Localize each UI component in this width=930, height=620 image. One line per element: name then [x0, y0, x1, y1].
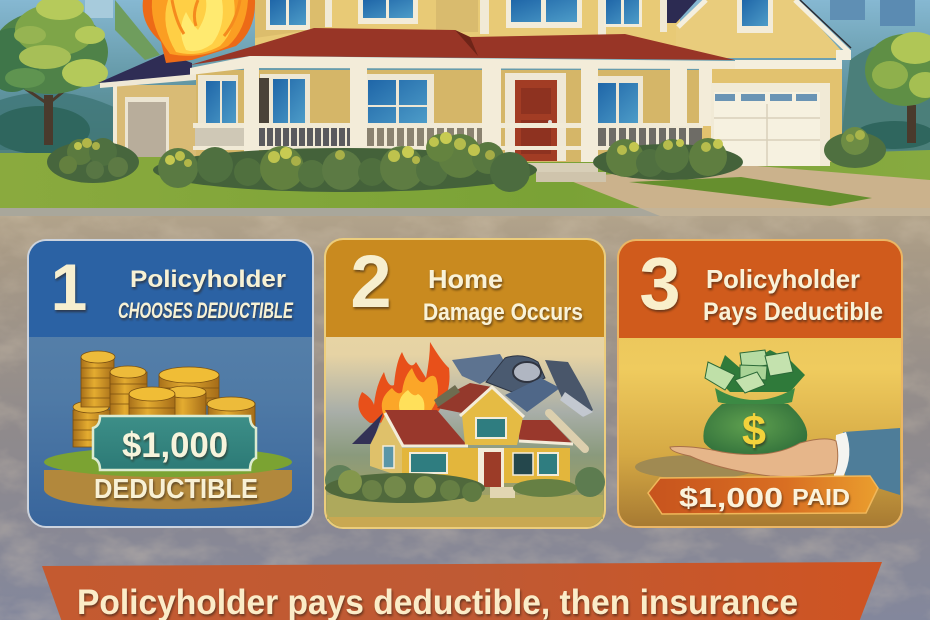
step 3 header: [619, 241, 901, 338]
step 1 title: Policyholder: [130, 266, 286, 293]
grass platform: [44, 447, 292, 509]
icon: sleeve: [834, 428, 900, 495]
columns: [244, 68, 712, 162]
step 1 number: 1: [51, 250, 87, 324]
step 3 title: Policyholder: [706, 264, 860, 294]
icon: hand: [670, 439, 838, 477]
tree: right: [865, 32, 930, 143]
bush: far left: [47, 138, 139, 183]
bush: far right: [824, 127, 886, 168]
step 1 header: [29, 241, 312, 337]
window: porch 3: [362, 74, 434, 124]
bush: long row: [153, 132, 537, 192]
banner: summary: [42, 562, 882, 620]
step 1 title: CHOOSES DEDUCTIBLE: [118, 298, 294, 323]
door: [505, 73, 566, 161]
ribbon: $1,000 paid: $1,000: [679, 482, 783, 513]
red roof: [190, 28, 735, 65]
window: porch 2: [259, 74, 310, 126]
window: upper 1: [266, 0, 310, 30]
ribbon: $1,000 paid: [648, 476, 878, 514]
house: porch wall: [196, 70, 700, 162]
label: deductible: DEDUCTIBLE: [94, 473, 258, 504]
step 1 title: [118, 266, 294, 323]
icon: money bag: [703, 350, 807, 458]
step 3 title: Pays Deductible: [703, 298, 883, 326]
icon: keys: [452, 354, 593, 449]
hand shadow: [635, 455, 759, 479]
right garage door: [711, 83, 830, 166]
step 2 title: Home: [428, 264, 503, 294]
band: [735, 60, 842, 69]
house: left garage: [98, 53, 200, 157]
coin stacks: [73, 351, 255, 447]
step 2 title: Damage Occurs: [423, 299, 583, 326]
window: porch 4: [594, 76, 643, 124]
step 2 number: 2: [350, 240, 392, 323]
bushes along house: [47, 127, 886, 192]
illustration: shrubs: [325, 470, 577, 503]
panel: step 1: [27, 239, 314, 528]
railings: [193, 123, 703, 150]
icon: damaged house: [352, 383, 573, 498]
house: right garage wall: [700, 66, 842, 162]
window: upper 3: [506, 0, 582, 28]
background sky and city: [0, 0, 930, 165]
plaque: $1,000: $1,000: [122, 426, 228, 465]
icon: money bag: $: [742, 407, 766, 455]
tree: left: [0, 0, 108, 145]
panel: step 3: [617, 239, 903, 528]
step 2 header: [326, 240, 604, 337]
step 3 number: 3: [639, 242, 681, 325]
window: upper 4: [604, 0, 642, 27]
window: porch 1: [198, 75, 238, 125]
background ground: [0, 205, 930, 620]
house: [98, 0, 851, 166]
panel: step 2: [324, 238, 606, 529]
illustration: lawn: [325, 465, 605, 527]
step 3 title: [703, 264, 883, 326]
window: upper 2: [358, 0, 418, 24]
ribbon: $1,000 paid: PAID: [792, 484, 850, 510]
step 2 title: [423, 264, 583, 326]
fire on roof: [143, 0, 255, 63]
icon: flames: [358, 342, 450, 423]
window: gable: [737, 0, 773, 33]
house: upper storey: [255, 0, 851, 60]
bush: right of steps: [593, 138, 743, 180]
porch beam: [190, 56, 735, 75]
lawn and driveway: [0, 150, 930, 216]
plaque: $1,000: [93, 416, 256, 470]
